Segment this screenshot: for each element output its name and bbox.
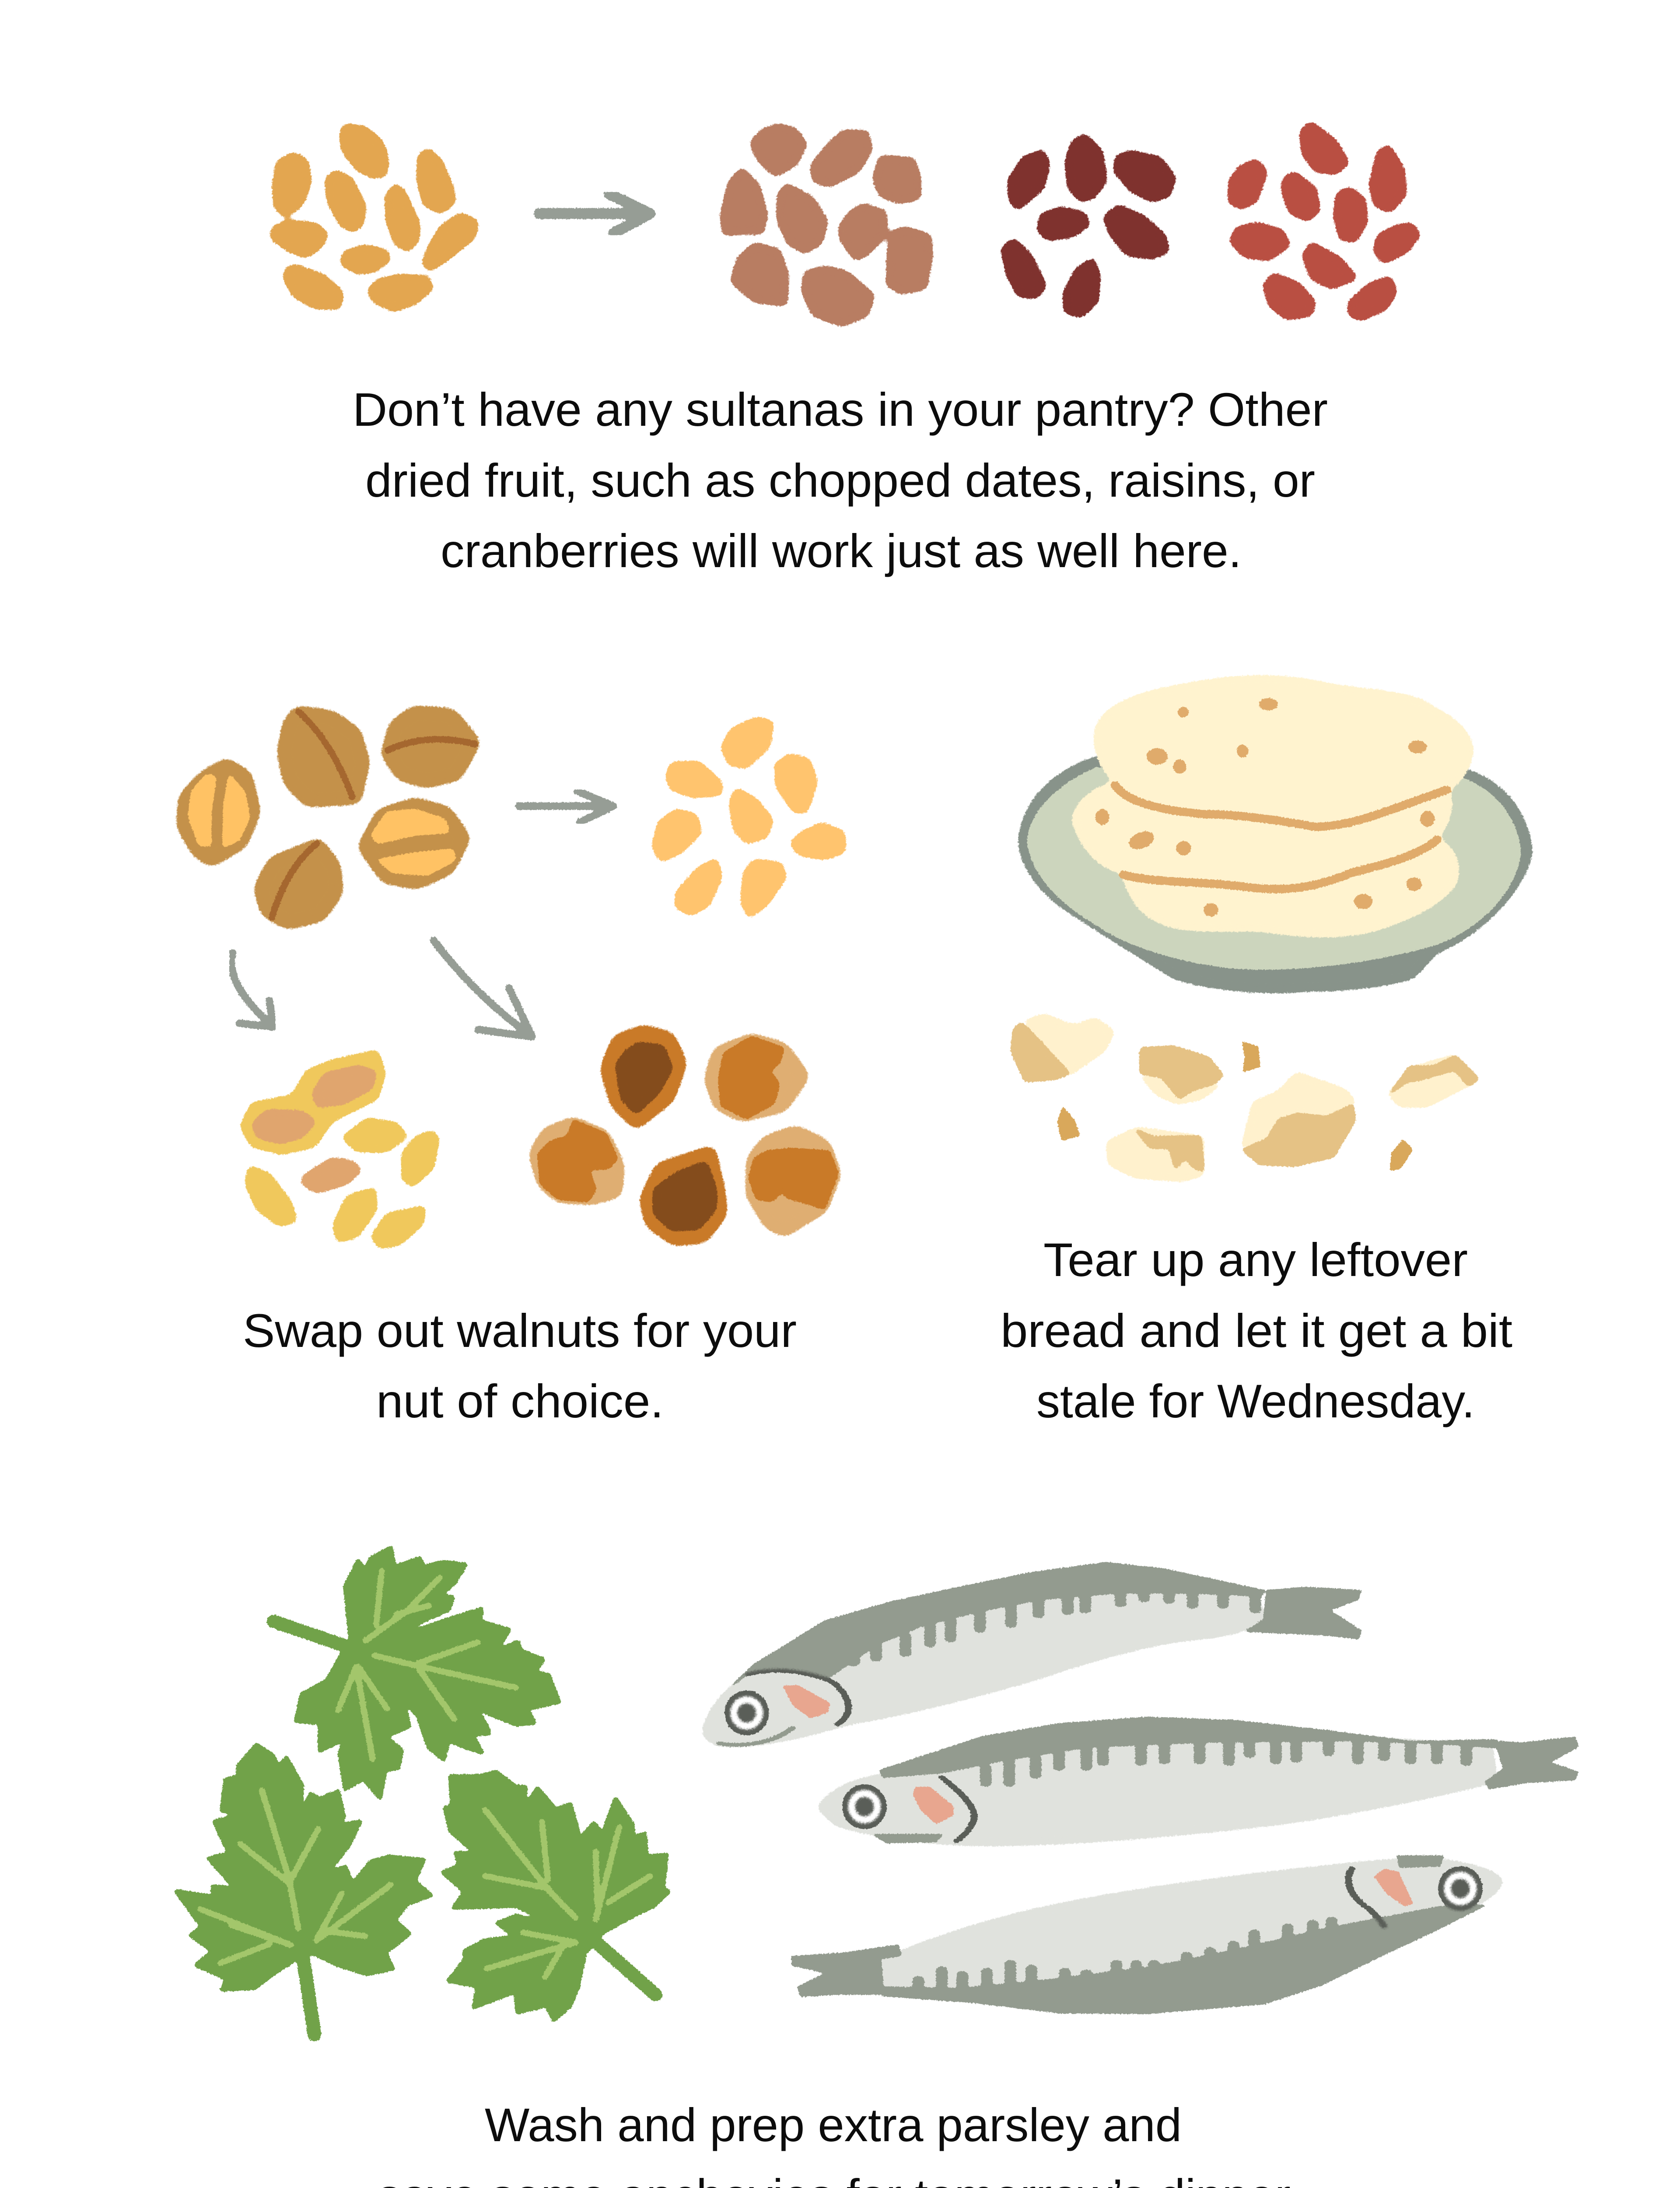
icon: plate of flatbreads xyxy=(1018,675,1533,993)
caption: dried fruit xyxy=(353,383,1328,577)
arrow: to hazelnuts xyxy=(434,940,532,1037)
icon: peanuts xyxy=(241,1051,439,1248)
icon: walnuts xyxy=(178,707,480,929)
caption: bread: bread and let it get a bit xyxy=(1001,1304,1512,1357)
caption: bread xyxy=(1001,1233,1512,1427)
panel: leftover bread xyxy=(1001,675,1533,1427)
caption: dried fruit: cranberries will work just as well here. xyxy=(441,524,1242,577)
icon: anchovy top xyxy=(702,1563,1361,1747)
caption: bread: stale for Wednesday. xyxy=(1036,1375,1475,1427)
icon: raisins xyxy=(1001,134,1176,317)
panel: dried fruit swap xyxy=(271,122,1420,577)
icon: parsley leaves xyxy=(177,1548,668,2035)
caption: parsley and anchovies: Wash and prep extra parsley and xyxy=(485,2098,1182,2151)
panel: nut swap xyxy=(178,707,844,1427)
caption: bread: Tear up any leftover xyxy=(1043,1233,1468,1286)
arrow: to kernels xyxy=(519,791,613,822)
icon: chopped dates xyxy=(721,124,932,326)
icon: hazelnuts xyxy=(529,1026,840,1245)
arrow: to peanuts xyxy=(231,953,273,1027)
caption: nuts: nut of choice. xyxy=(376,1375,664,1427)
panel: parsley and anchovies xyxy=(177,1548,1578,2188)
caption: nuts: Swap out walnuts for your xyxy=(243,1304,797,1357)
caption: nuts xyxy=(243,1304,797,1427)
icon: sultanas xyxy=(271,124,478,311)
icon: walnut kernels xyxy=(653,718,844,918)
icon: cranberries xyxy=(1229,122,1420,320)
caption: dried fruit: Don’t have any sultanas in your pantry? Other xyxy=(353,383,1328,436)
caption: dried fruit: dried fruit, such as chopped dates, raisins, or xyxy=(365,454,1315,507)
icon: anchovy bottom xyxy=(792,1856,1504,2013)
icon: torn bread pieces xyxy=(1012,1015,1479,1181)
caption: parsley and anchovies xyxy=(378,2098,1301,2188)
arrow: sultanas to alternatives xyxy=(539,194,650,233)
icon: anchovy middle xyxy=(816,1718,1578,1846)
